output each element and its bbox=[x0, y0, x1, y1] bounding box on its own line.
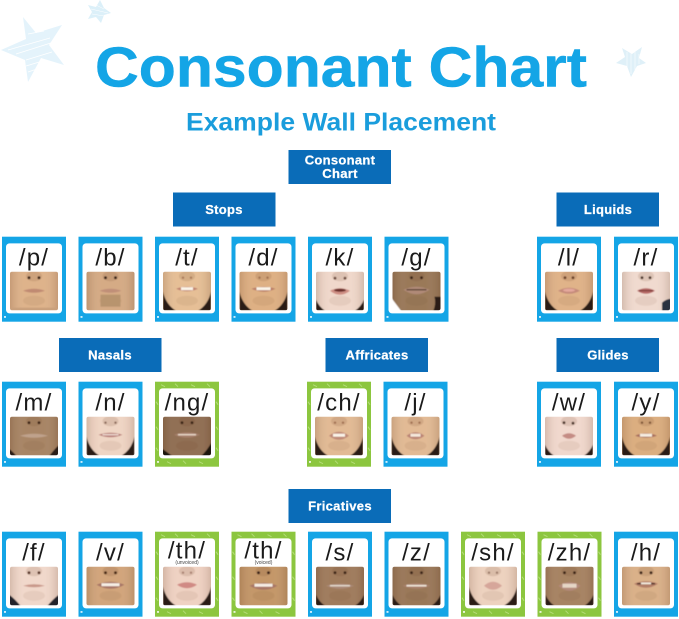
card: /t/ bbox=[155, 237, 219, 322]
title: Consonant Chart bbox=[95, 36, 587, 100]
card: /z/ bbox=[384, 532, 448, 617]
card: /l/ bbox=[537, 237, 601, 322]
heading: Stops: Stops bbox=[205, 202, 243, 217]
card: /v/ bbox=[78, 532, 142, 617]
card: /zh/: /zh/ bbox=[548, 540, 591, 567]
card: /r/ bbox=[614, 237, 678, 322]
card: /k/ bbox=[308, 237, 372, 322]
card: /sh/ bbox=[461, 532, 525, 617]
card: /w/: /w/ bbox=[552, 390, 586, 417]
card: /r/: /r/ bbox=[634, 245, 658, 272]
heading: Glides: Glides bbox=[587, 348, 629, 362]
card: /j/ bbox=[384, 382, 448, 467]
icon: small sketched star bbox=[88, 0, 111, 23]
card: /th/ voiced: (voiced) bbox=[255, 560, 273, 566]
card: /s/: /s/ bbox=[326, 540, 354, 567]
heading: Fricatives: Fricatives bbox=[308, 498, 372, 514]
heading: Affricates: Affricates bbox=[346, 348, 408, 362]
card: /th/ unvoiced: /th/ bbox=[168, 538, 206, 565]
card: /y/ bbox=[614, 382, 678, 467]
card: /h/ bbox=[614, 532, 678, 617]
heading: Nasals: Nasals bbox=[88, 348, 132, 362]
card: /th/ voiced bbox=[232, 532, 296, 617]
card: /th/ unvoiced: (unvoiced) bbox=[175, 560, 199, 566]
card: /l/: /l/ bbox=[558, 245, 580, 272]
card: /d/: /d/ bbox=[248, 245, 279, 272]
icon: large sketched star bbox=[1, 17, 64, 82]
card: /s/ bbox=[308, 532, 372, 617]
card: /n/ bbox=[78, 382, 142, 467]
subtitle: Example Wall Placement bbox=[186, 108, 497, 136]
heading: Liquids bbox=[556, 192, 659, 226]
card: /j/: /j/ bbox=[404, 390, 427, 417]
heading: Liquids: Liquids bbox=[584, 202, 632, 217]
card: /b/: /b/ bbox=[95, 245, 126, 272]
card: /f/: /f/ bbox=[22, 540, 46, 567]
card: /h/: /h/ bbox=[631, 540, 661, 567]
card: /zh/ bbox=[538, 532, 602, 617]
card: /ch/ bbox=[307, 382, 371, 467]
card: /w/ bbox=[537, 382, 601, 467]
card: /p/: /p/ bbox=[19, 245, 49, 272]
card: /y/: /y/ bbox=[632, 390, 660, 417]
card: /m/: /m/ bbox=[16, 390, 52, 417]
heading: Stops bbox=[173, 192, 276, 226]
card: /v/: /v/ bbox=[96, 540, 125, 567]
card: /z/: /z/ bbox=[402, 540, 431, 567]
card: /g/: /g/ bbox=[401, 245, 432, 272]
card: /m/ bbox=[2, 382, 66, 467]
heading: Fricatives bbox=[288, 489, 391, 523]
heading: Consonant Chart: Chart bbox=[322, 166, 358, 181]
heading: Glides bbox=[556, 338, 659, 372]
card: /th/ unvoiced bbox=[155, 532, 219, 617]
card: /sh/: /sh/ bbox=[471, 540, 515, 567]
card: /g/ bbox=[384, 237, 448, 322]
card: /k/: /k/ bbox=[326, 245, 354, 272]
card: /ch/: /ch/ bbox=[317, 390, 361, 417]
heading: Affricates bbox=[326, 338, 428, 372]
card: /f/ bbox=[2, 532, 66, 617]
card: /ng/: /ng/ bbox=[165, 390, 209, 417]
card: /d/ bbox=[232, 237, 296, 322]
heading: Consonant Chart bbox=[288, 150, 391, 184]
heading: Nasals bbox=[59, 338, 162, 372]
card: /n/: /n/ bbox=[95, 390, 126, 417]
card: /th/ voiced: /th/ bbox=[244, 538, 283, 565]
card: /t/: /t/ bbox=[175, 245, 199, 272]
card: /p/ bbox=[2, 237, 66, 322]
heading: Consonant Chart: Consonant bbox=[305, 152, 376, 168]
icon: right sketched star bbox=[616, 47, 646, 77]
card: /ng/ bbox=[155, 382, 219, 467]
card: /b/ bbox=[78, 237, 142, 322]
